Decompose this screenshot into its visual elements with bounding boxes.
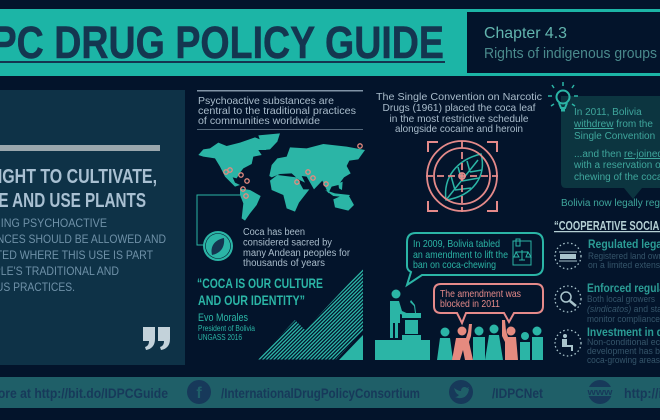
- heading: right to cultivate: [0, 166, 157, 212]
- callout: amendment blocked: The amendment was: [440, 288, 521, 300]
- quote: Evo Morales: UNGASS 2016: [198, 333, 242, 342]
- item: investment in development: [555, 325, 660, 365]
- chart: hatched mountains: [258, 268, 363, 360]
- quote: Evo Morales: “COCA IS OUR CULTURE: [197, 275, 323, 291]
- footer bar: /InternationalDrugPolicyConsortium: [221, 385, 420, 401]
- text block: psychoactive substances: Psychoactive substances are: [198, 95, 334, 107]
- body text: consuming psychoactive substances: [0, 216, 166, 294]
- callout: Bolivia withdrew and re-joined: withdrew from the: [573, 119, 653, 130]
- text block: single convention: Drugs (1961) placed the coca leaf: [382, 102, 536, 114]
- title banner: [0, 9, 660, 76]
- quote: Evo Morales: AND OUR IDENTITY”: [198, 292, 305, 308]
- item: regulated legal: [555, 237, 660, 270]
- item: investment in development: Non-conditional ec: [587, 337, 660, 347]
- text block: psychoactive substances: of communities worldwide: [198, 115, 320, 127]
- chapter heading: [484, 25, 657, 62]
- text block: single convention: [376, 91, 542, 135]
- text block: single convention: in the most restrictive schedule: [390, 113, 529, 125]
- icon: facebook: f: [196, 385, 202, 402]
- text block: coca considered sacred: Coca has been: [243, 227, 305, 238]
- item: enforced regulation: Both local growers: [587, 294, 655, 304]
- icon: lightbulb: [548, 82, 578, 110]
- quote: Evo Morales: Evo Morales: [198, 312, 248, 324]
- chapter heading: Chapter 4.3: [484, 25, 567, 42]
- item: enforced regulation: [555, 281, 660, 324]
- text block: coca considered sacred: [243, 227, 351, 269]
- callout: Bolivia withdrew and re-joined: In 2011, Bolivia: [574, 107, 642, 118]
- section: cooperative social control: [554, 219, 660, 365]
- icon: twitter: [449, 380, 473, 404]
- text block: single convention: alongside cocaine and heroin: [395, 123, 523, 135]
- speaker at podium: [375, 290, 430, 360]
- icon: legal document: [513, 239, 531, 265]
- panel: right to cultivate: [0, 90, 185, 365]
- callout: amendment blocked: blocked in 2011: [440, 298, 500, 310]
- icon: www globe: www: [586, 387, 614, 397]
- text block: coca considered sacred: thousands of years: [243, 258, 325, 269]
- text block: psychoactive substances: [197, 90, 363, 130]
- icon: target on coca leaf: [426, 141, 498, 212]
- callout: Bolivia withdrew and re-joined: [561, 96, 660, 209]
- callout: amendment blocked: [434, 284, 543, 323]
- icon: closing quotation mark: [143, 327, 170, 350]
- map pins: [224, 144, 362, 198]
- world map with pins: [198, 133, 365, 221]
- footer bar: [0, 377, 660, 408]
- map landmasses: [198, 133, 365, 221]
- footer bar: /IDPCNet: [492, 385, 543, 401]
- callout: amendment tabled in 2009: ban on coca-chewing: [413, 259, 496, 271]
- text block: coca considered sacred: considered sacred by: [243, 238, 332, 248]
- callout: amendment tabled in 2009: In 2009, Bolivia tabled: [413, 238, 500, 250]
- icon: coca leaf circle: [203, 231, 233, 261]
- callout: amendment tabled in 2009: an amendment to lift the: [413, 249, 508, 261]
- audience: [437, 320, 543, 360]
- text block: psychoactive substances: central to the traditional practices: [198, 105, 356, 117]
- callout: Bolivia withdrew and re-joined: Single Convention: [574, 131, 655, 142]
- quote: Evo Morales: [197, 275, 323, 342]
- icon: facebook: [187, 380, 211, 404]
- callout: amendment tabled in 2009: [407, 233, 543, 285]
- icon: www globe: [586, 380, 614, 404]
- quote: Evo Morales: President of Bolivia: [198, 324, 255, 333]
- connector line from map to coca icon: [197, 195, 240, 245]
- leaf: [446, 154, 482, 200]
- text block: coca considered sacred: many Andean peoples for: [243, 248, 351, 259]
- text block: single convention: The Single Convention on Narcotic: [376, 91, 542, 103]
- pink raised-hand figures: [452, 320, 518, 360]
